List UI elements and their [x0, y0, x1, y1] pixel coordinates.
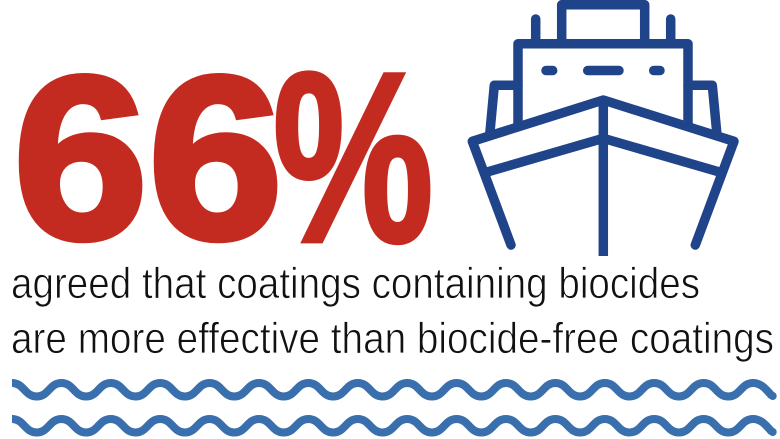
wave lines: [12, 383, 777, 436]
caption text: agreed that coatings containing biocides: [11, 259, 700, 308]
big statistic: 66%: [13, 23, 433, 293]
caption text: [11, 259, 774, 363]
big statistic: 66%: %: [273, 23, 433, 293]
big statistic: 66%: 66: [13, 29, 283, 288]
icon: ship seen from the bow: [472, 5, 734, 256]
